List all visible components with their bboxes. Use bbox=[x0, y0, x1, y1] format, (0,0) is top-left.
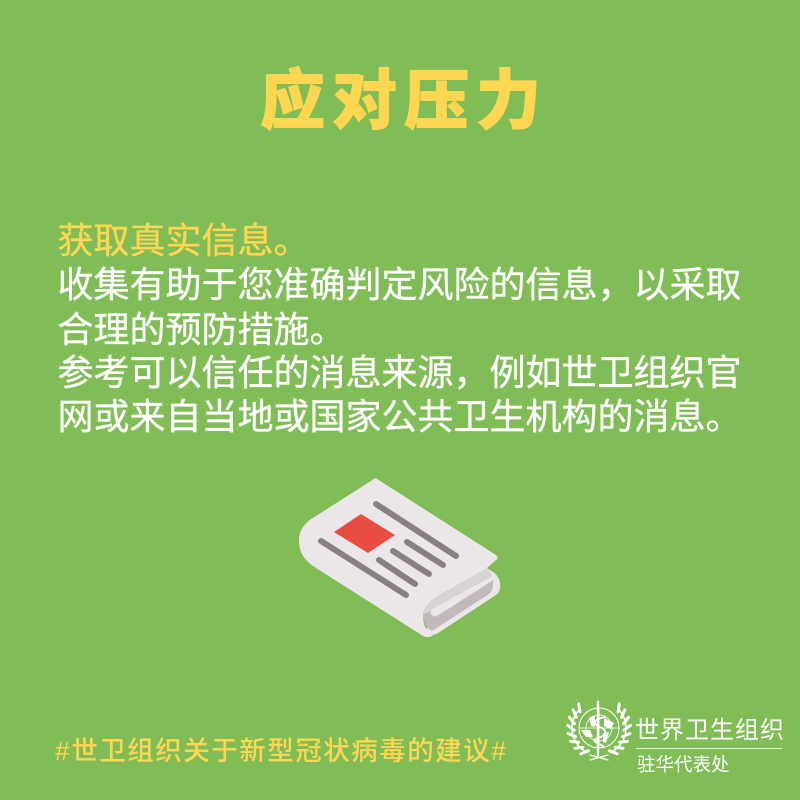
logo: WHO bbox=[566, 700, 785, 775]
heading: get reliable information: 获取真实信息。 bbox=[58, 220, 310, 261]
paragraph line 3: 参考可以信任的消息来源，例如世卫组织官 bbox=[58, 352, 742, 393]
hashtag: #世卫组织关于新型冠状病毒的建议# bbox=[55, 736, 507, 766]
organisation name: 世界卫生组织 bbox=[635, 717, 785, 744]
icon: WHO emblem bbox=[566, 700, 632, 761]
paragraph line 4: 网或来自当地或国家公共卫生机构的消息。 bbox=[58, 396, 742, 437]
paragraph line 1: 收集有助于您准确判定风险的信息，以采取 bbox=[58, 264, 742, 305]
paragraph line 2: 合理的预防措施。 bbox=[58, 308, 346, 350]
title: 应对压力 bbox=[260, 64, 548, 137]
text block: advice bbox=[58, 220, 742, 437]
organisation subtitle: 驻华代表处 bbox=[637, 754, 730, 775]
